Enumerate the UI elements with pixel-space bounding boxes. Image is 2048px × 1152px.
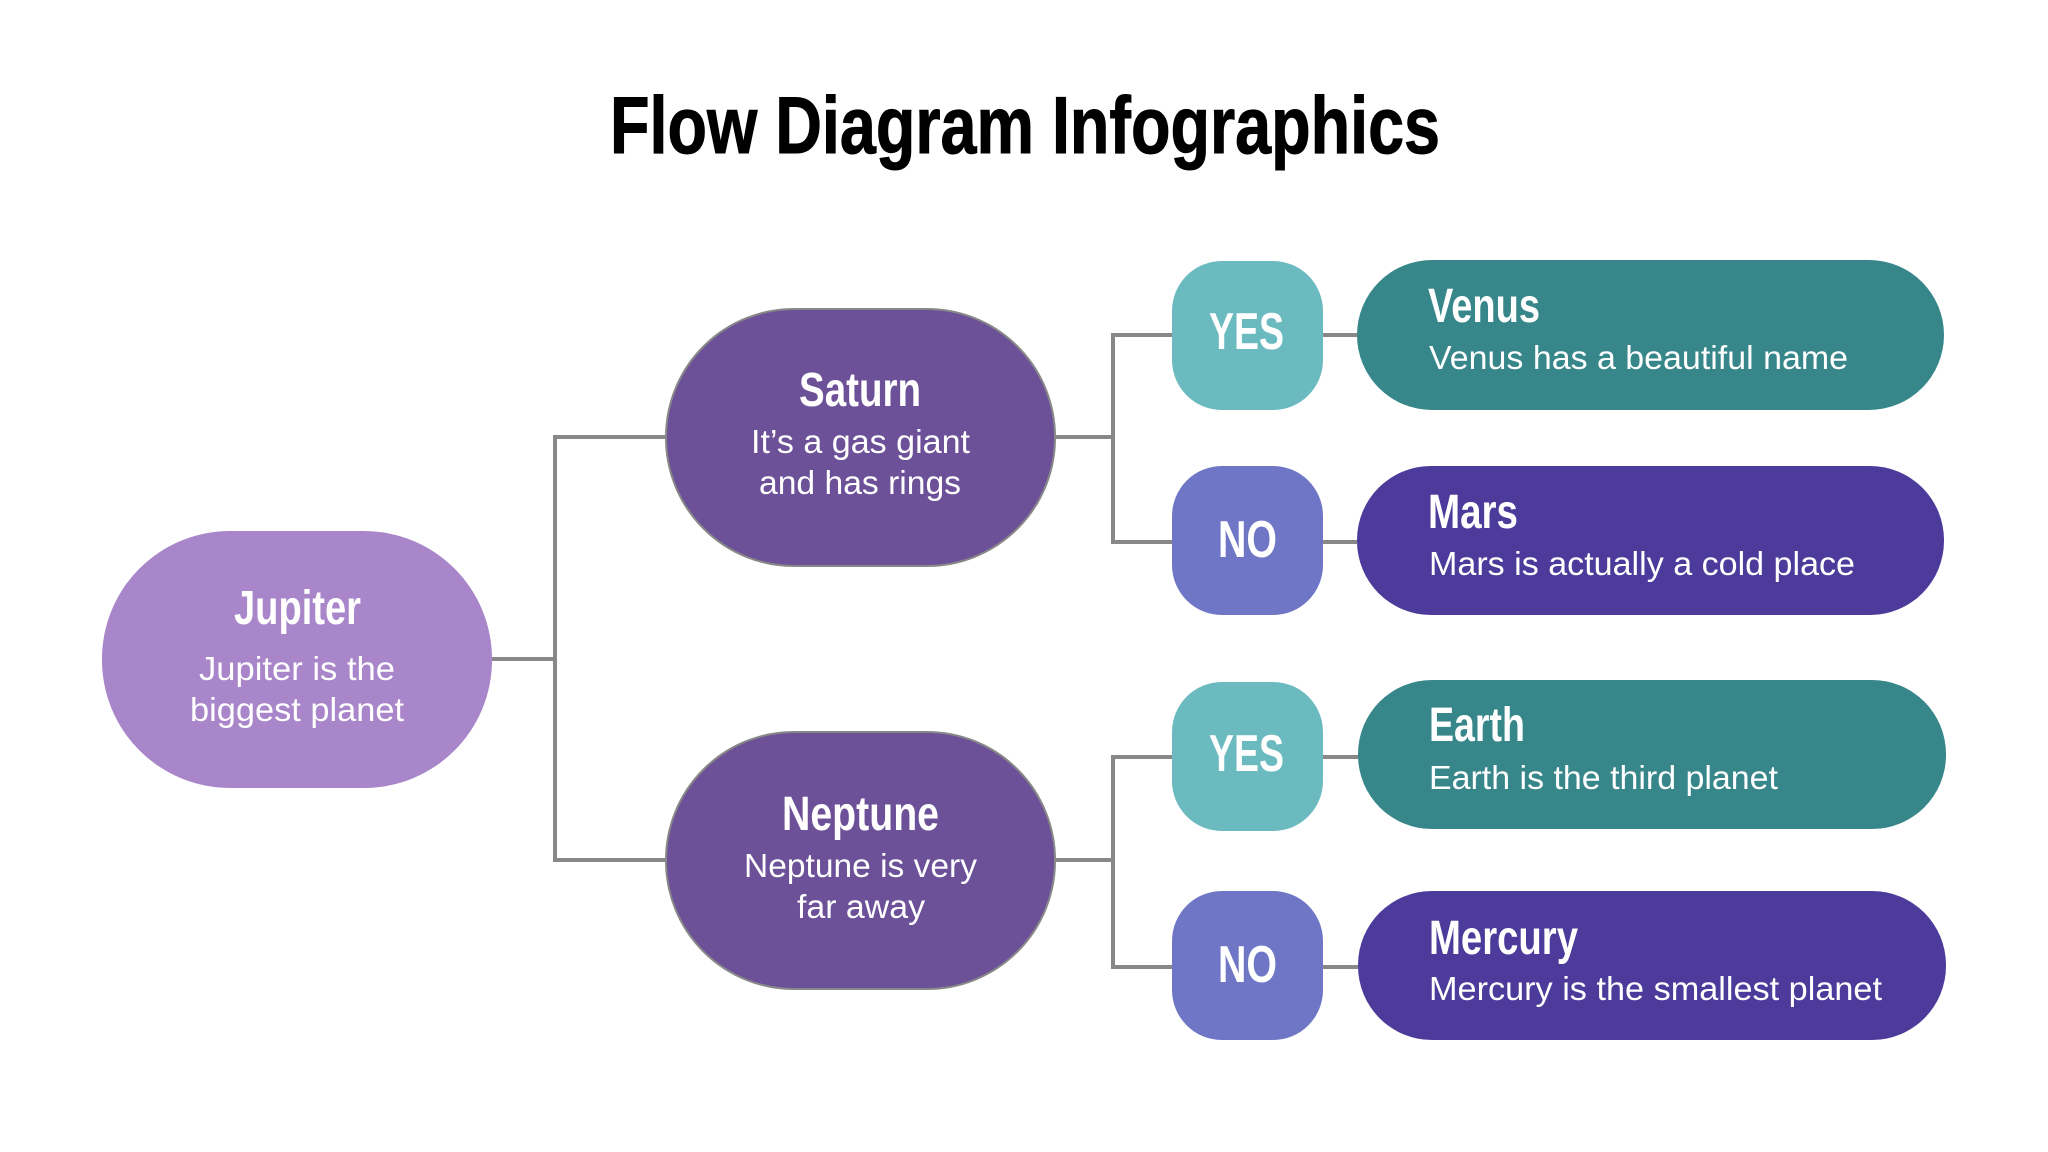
node: Jupiter [102, 531, 492, 788]
node: Saturn: and has rings [759, 464, 961, 501]
connector: No to Mars [1323, 540, 1357, 544]
node: Jupiter: Jupiter [234, 582, 361, 635]
connector: Saturn to Yes and No [1056, 335, 1172, 542]
badge: Yes (Saturn): YES [1209, 303, 1284, 361]
result: Mercury: Mercury [1429, 912, 1578, 965]
node: Saturn: It’s a gas giant [751, 423, 970, 460]
connector: Neptune to Yes and No [1056, 757, 1172, 967]
result: Earth: Earth is the third planet [1429, 759, 1778, 796]
badge: No (Saturn): NO [1218, 511, 1277, 569]
badge: No (Neptune) [1172, 891, 1323, 1040]
node: Jupiter: biggest planet [190, 691, 404, 728]
result: Venus: Venus [1428, 280, 1540, 333]
connector: Jupiter to Saturn and Neptune [492, 437, 665, 860]
node: Saturn [666, 309, 1055, 566]
badge: No (Saturn) [1172, 466, 1323, 615]
badge: No (Neptune): NO [1218, 936, 1277, 994]
title: Flow Diagram Infographics [610, 81, 1440, 171]
connector: Yes to Venus [1323, 333, 1357, 337]
connector: No to Mercury [1323, 965, 1358, 969]
badge: Yes (Neptune): YES [1209, 725, 1284, 783]
node: Neptune: far away [797, 888, 926, 925]
result: Mercury [1358, 891, 1946, 1040]
node: Neptune: Neptune is very [744, 847, 978, 884]
result: Earth: Earth [1429, 699, 1525, 752]
result: Mars: Mars [1428, 486, 1518, 539]
result: Earth [1358, 680, 1946, 829]
node: Neptune [666, 732, 1055, 989]
result: Mars [1357, 466, 1944, 615]
node: Neptune: Neptune [782, 788, 939, 841]
result: Mars: Mars is actually a cold place [1429, 545, 1855, 582]
result: Venus: Venus has a beautiful name [1429, 339, 1848, 376]
connector: Yes to Earth [1323, 755, 1358, 759]
result: Mercury: Mercury is the smallest planet [1429, 970, 1882, 1007]
node: Jupiter: Jupiter is the [199, 650, 395, 687]
node: Saturn: Saturn [799, 364, 921, 417]
badge: Yes (Saturn) [1172, 261, 1323, 410]
result: Venus [1357, 260, 1944, 410]
badge: Yes (Neptune) [1172, 682, 1323, 831]
